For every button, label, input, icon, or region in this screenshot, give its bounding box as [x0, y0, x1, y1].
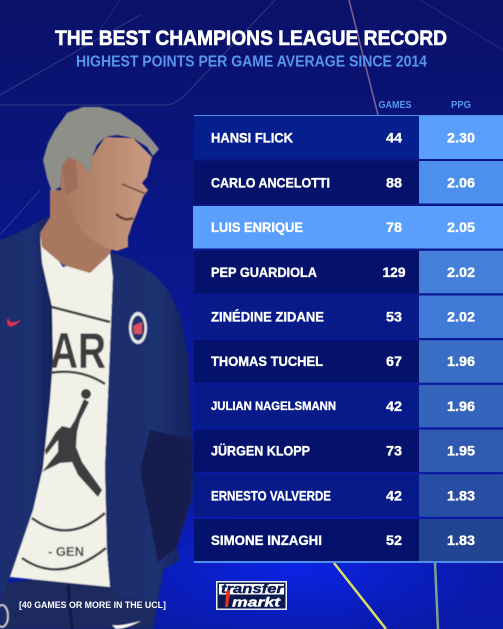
coach photo illustration [0, 107, 193, 629]
row: Julian Nagelsmann: 1.96 [447, 398, 475, 414]
ear [62, 157, 78, 195]
row: Ernesto Valverde: 42 [386, 487, 402, 503]
smile [116, 214, 133, 219]
transfermarkt logo: transfer [221, 582, 285, 596]
row: Simone Inzaghi: 52 [386, 532, 402, 548]
row: Carlo Ancelotti: 88 [386, 174, 402, 190]
nike swoosh on jacket [7, 318, 21, 326]
eye [122, 184, 146, 194]
title: THE BEST CHAMPIONS LEAGUE RECORD [55, 27, 447, 50]
row: Jurgen Klopp: 73 [386, 443, 402, 459]
row: Julian Nagelsmann: JULIAN NAGELSMANN [211, 399, 336, 413]
drawstring [68, 585, 72, 629]
row: Pep Guardiola [194, 251, 503, 293]
trousers [0, 562, 165, 629]
row: Carlo Ancelotti: CARLO ANCELOTTI [211, 174, 330, 190]
row: Julian Nagelsmann: 42 [386, 398, 402, 414]
row: Thomas Tuchel: 67 [386, 353, 402, 369]
row: Luis Enrique (highlighted): LUIS ENRIQUE [211, 219, 303, 235]
crest on shorts [0, 605, 8, 627]
row: Zinedine Zidane [194, 296, 503, 338]
row: Pep Guardiola: 129 [382, 264, 406, 280]
psg crest [129, 312, 147, 344]
row: Carlo Ancelotti [194, 161, 503, 204]
shirt print: arcs and jumpman [22, 307, 110, 569]
footnote: [40 GAMES OR MORE IN THE UCL] [19, 600, 166, 611]
row: Jurgen Klopp: 1.95 [447, 443, 475, 459]
row: Thomas Tuchel: THOMAS TUCHEL [211, 353, 323, 369]
table of coaches [193, 115, 503, 563]
hair [43, 107, 159, 192]
row: Simone Inzaghi: SIMONE INZAGHI [211, 532, 322, 548]
row: Pep Guardiola: PEP GUARDIOLA [211, 264, 317, 280]
row: Jurgen Klopp [194, 430, 503, 472]
row: Hansi Flick: 2.30 [447, 130, 475, 146]
row: Luis Enrique (highlighted) [193, 206, 503, 248]
row: Ernesto Valverde: ERNESTO VALVERDE [211, 487, 331, 503]
column header: games: GAMES [378, 100, 412, 111]
transfermarkt logo [216, 581, 287, 610]
nike swoosh on shorts [112, 621, 141, 629]
row: Zinedine Zidane: 2.02 [447, 308, 475, 324]
transfermarkt logo: markt [232, 596, 281, 610]
row: Luis Enrique (highlighted): 78 [386, 219, 402, 235]
row: Luis Enrique (highlighted): 2.05 [447, 219, 475, 235]
t-shirt [10, 233, 113, 587]
row: Zinedine Zidane: 53 [386, 308, 402, 324]
subtitle: HIGHEST POINTS PER GAME AVERAGE SINCE 2014 [76, 54, 427, 70]
row: Hansi Flick: 44 [386, 130, 402, 146]
row: Simone Inzaghi: 1.83 [447, 532, 475, 548]
row: Ernesto Valverde [194, 474, 503, 517]
neck [40, 190, 120, 273]
head [60, 137, 152, 251]
jacket [0, 216, 193, 600]
shirt print: arcs and jumpman: AR [50, 323, 106, 379]
row: Hansi Flick [194, 116, 503, 159]
row: Carlo Ancelotti: 2.06 [447, 174, 475, 190]
row: Hansi Flick: HANSI FLICK [211, 130, 293, 146]
row: Jurgen Klopp: JÜRGEN KLOPP [211, 443, 310, 459]
row: Zinedine Zidane: ZINÉDINE ZIDANE [211, 308, 324, 324]
row: Pep Guardiola: 2.02 [447, 264, 475, 280]
row: Thomas Tuchel: 1.96 [447, 353, 475, 369]
shirt print: arcs and jumpman: - GEN [48, 544, 84, 559]
row: Thomas Tuchel [194, 340, 503, 383]
column header: ppg: PPG [451, 100, 471, 111]
row: Julian Nagelsmann [194, 385, 503, 427]
row: Ernesto Valverde: 1.83 [447, 487, 475, 503]
row: Simone Inzaghi [194, 519, 503, 562]
